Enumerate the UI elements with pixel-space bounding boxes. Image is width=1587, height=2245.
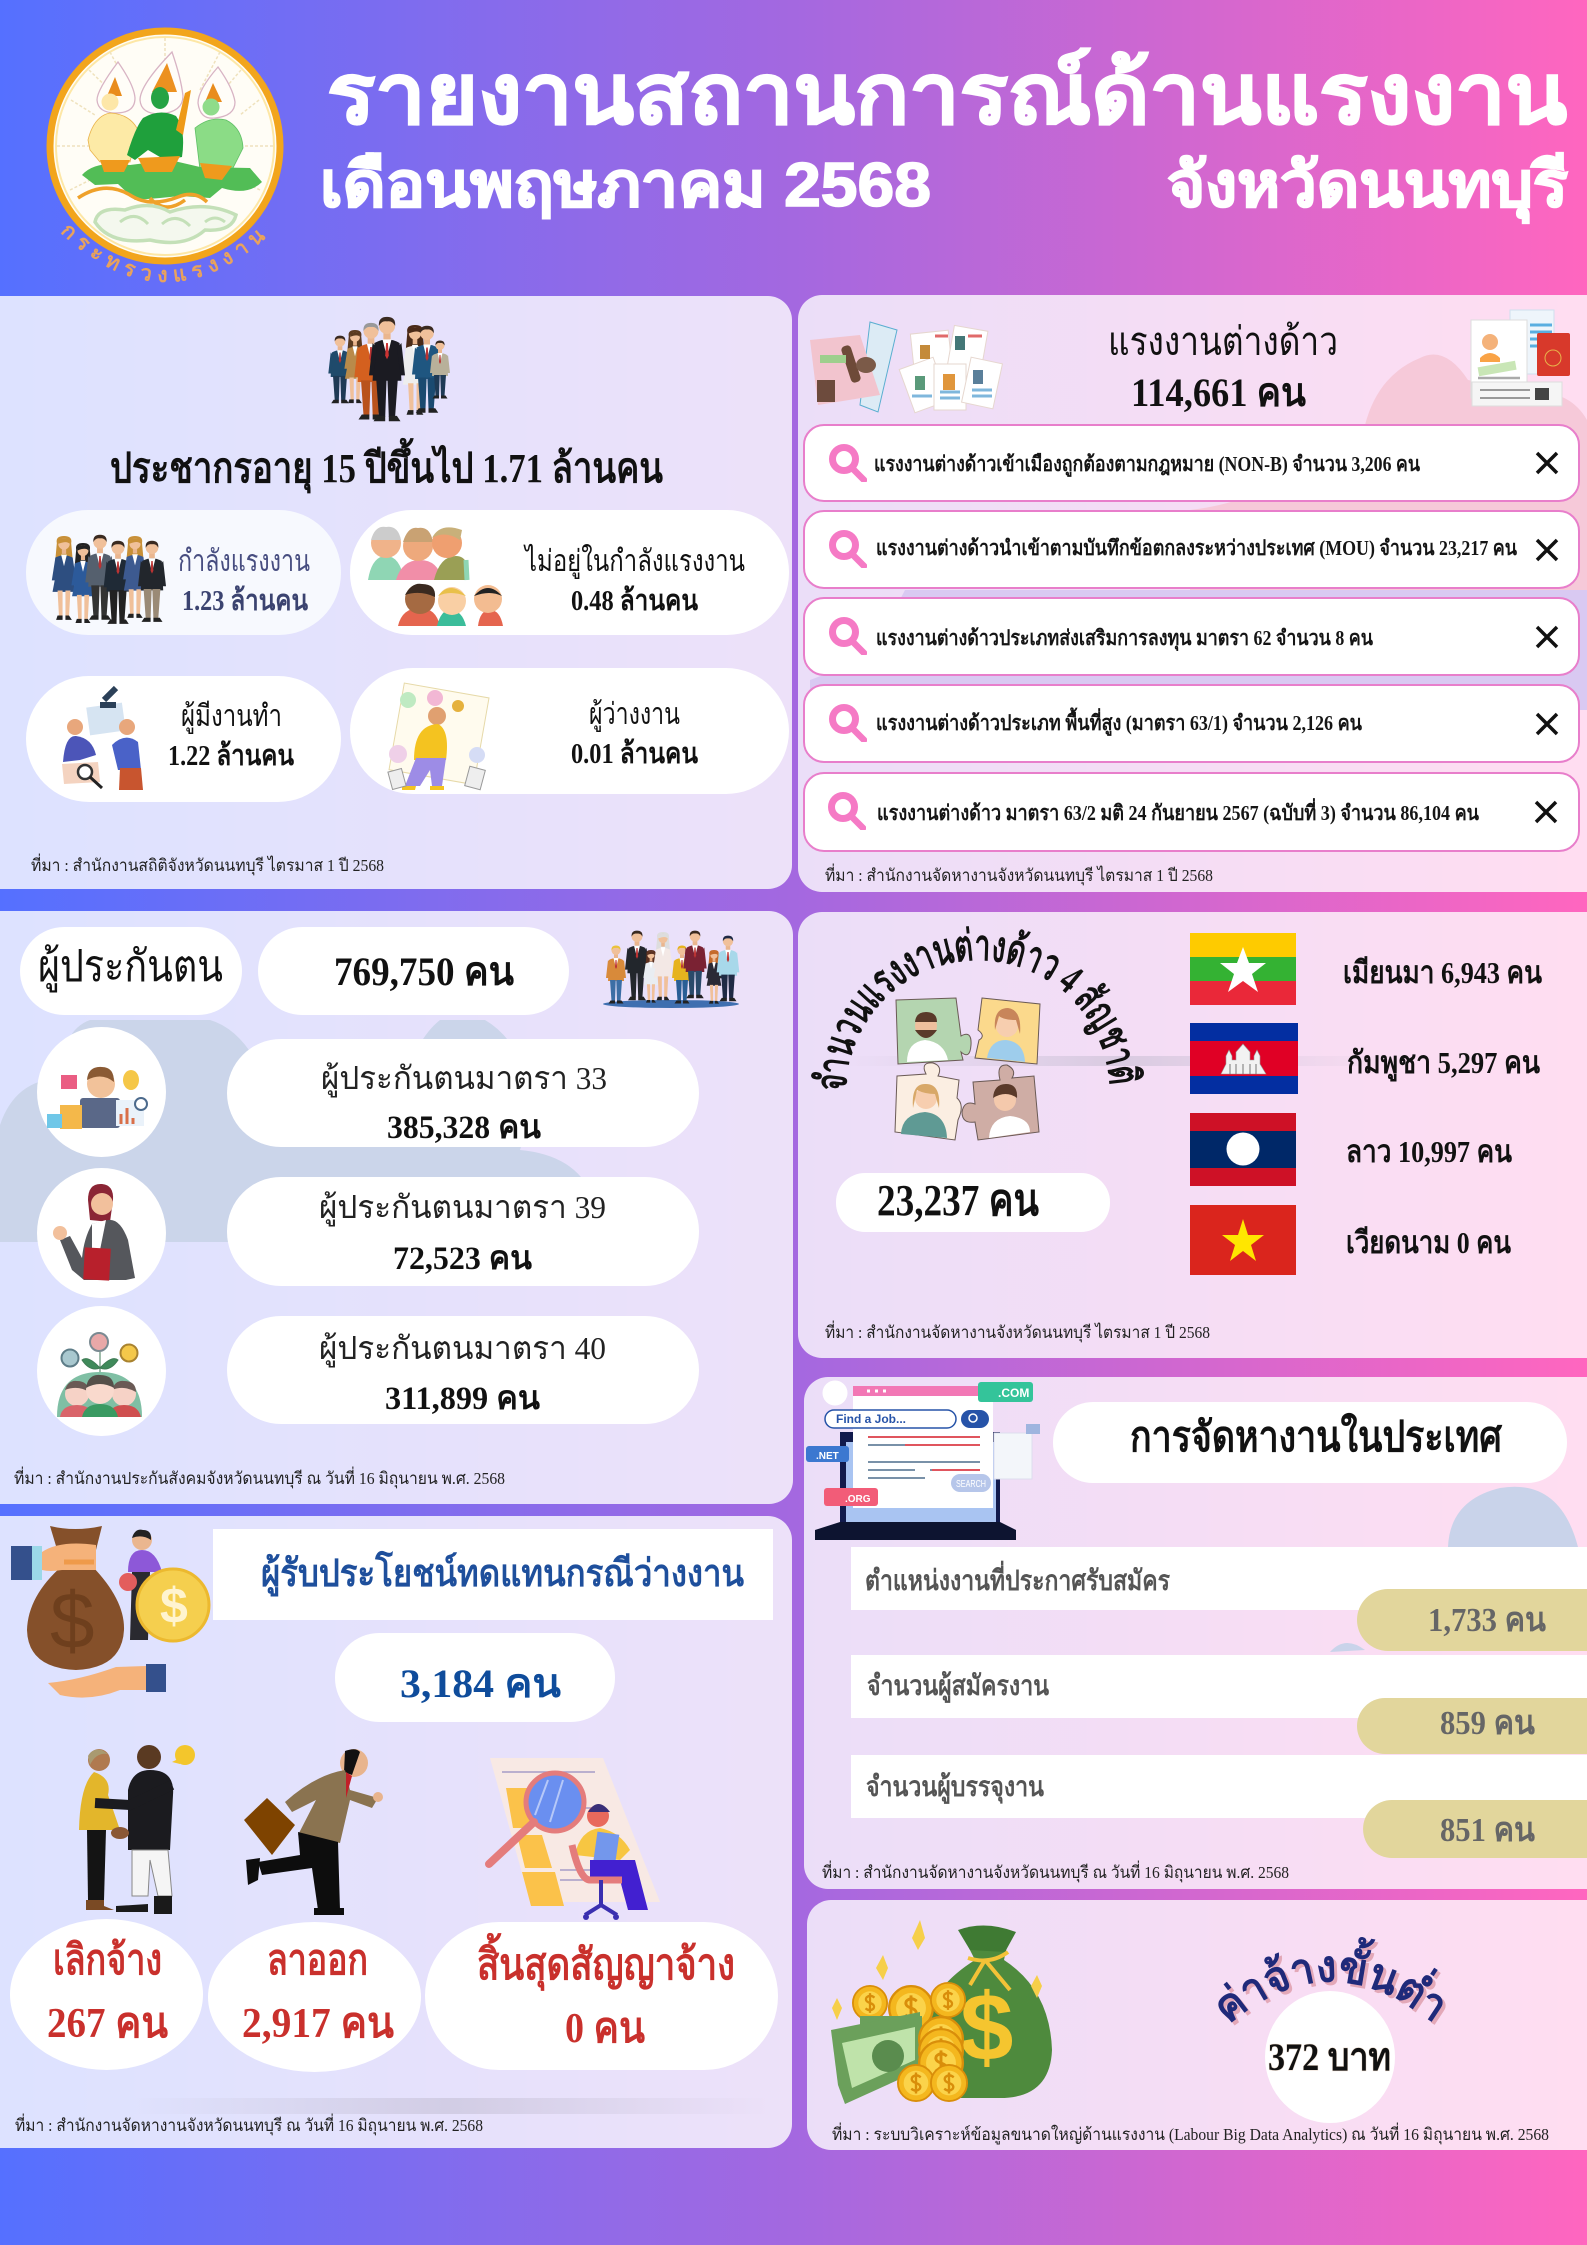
value: 0.01 ล้านคน <box>571 738 698 770</box>
icon: handshake <box>79 1745 195 1914</box>
label: กำลังแรงงาน <box>178 545 310 578</box>
value: 72,523 คน <box>393 1241 532 1277</box>
pill: terminated <box>10 1919 203 2070</box>
card: outside labour force <box>350 510 789 635</box>
source note: ที่มา : สำนักงานสถิติจังหวัดนนทบุรี ไตรมาส 1 ปี 2568 <box>31 853 384 876</box>
panel: minimum wage <box>807 1900 1587 2150</box>
pill: recipients total <box>335 1633 615 1722</box>
curved heading: จำนวนแรงงานต่างด้าว 4 สัญชาติ <box>811 926 1144 1089</box>
row: placed: จำนวนผู้บรรจุงาน <box>866 1772 1044 1804</box>
icon: job search laptop <box>806 1382 1040 1540</box>
icon: job search laptop: .NET <box>816 1451 839 1462</box>
panel: foreign workers <box>798 295 1587 892</box>
panel: domestic job placement <box>804 1377 1587 1889</box>
source note: ที่มา : สำนักงานจัดหางานจังหวัดนนทบุรี ณ วันที่ 16 มิถุนายน พ.ศ. 2568 <box>822 1860 1289 1883</box>
row: vacancies: ตำแหน่งงานที่ประกาศรับสมัคร <box>865 1560 1170 1597</box>
row: section 40 <box>37 1306 699 1436</box>
curved heading: minimum wage shadow: ค่าจ้างขั้นต่ำ <box>1223 1940 1446 2026</box>
icon: group of people <box>328 317 450 421</box>
flag: Vietnam <box>1190 1205 1296 1275</box>
pill: terminated: 267 คน <box>47 2001 168 2047</box>
label: Cambodia: กัมพูชา 5,297 คน <box>1347 1045 1540 1082</box>
icon: searching documents <box>489 1758 660 1920</box>
label: Myanmar: เมียนมา 6,943 คน <box>1343 955 1542 990</box>
icon: employed people with documents <box>62 688 143 790</box>
wage circle <box>1265 1991 1395 2123</box>
heading: foreign workers: แรงงานต่างด้าว <box>1108 319 1338 364</box>
pill: recipients total: 3,184 คน <box>400 1661 561 1706</box>
panel: four nationalities <box>798 912 1587 1358</box>
panel: population aged 15 and over <box>0 296 792 889</box>
row: placed <box>851 1755 1587 1858</box>
list item: section 63/2: แรงงานต่างด้าว มาตรา 63/2 มติ 24 กันยายน 2567 (ฉบับที่ 3) จำนวน 86,104 คน <box>877 797 1480 825</box>
icon: money bag, cash and coins: $ <box>960 1974 1013 2081</box>
list item: section 63/2 <box>804 773 1579 851</box>
icon: job search laptop: .COM <box>998 1386 1029 1400</box>
card: labour force <box>26 510 341 635</box>
flag: Myanmar <box>1190 933 1296 1005</box>
label: Vietnam: เวียดนาม 0 คน <box>1346 1225 1511 1260</box>
value: 385,328 คน <box>387 1110 541 1146</box>
pill: terminated: เลิกจ้าง <box>53 1938 162 1984</box>
pill: contract ended: สิ้นสุดสัญญาจ้าง <box>477 1932 735 1992</box>
logo caption: กระทรวงแรงงาน <box>61 226 266 282</box>
label: ผู้มีงานทำ <box>181 700 282 734</box>
row: section 33 <box>37 1027 699 1157</box>
row: applicants: 859 คน <box>1440 1705 1535 1742</box>
list item: MOU <box>804 511 1579 588</box>
pill: insured persons total: 769,750 คน <box>334 949 514 994</box>
icon: job search laptop: .ORG <box>845 1494 871 1505</box>
pill: resigned <box>208 1922 421 2072</box>
label: ผู้ประกันตนมาตรา 33 <box>321 1060 607 1098</box>
puzzle piece: woman cream <box>895 1063 961 1140</box>
label: ผู้ประกันตนมาตรา 39 <box>319 1189 606 1227</box>
icon: job search laptop: SEARCH <box>956 1479 986 1490</box>
card: unemployed <box>350 668 789 794</box>
row: vacancies <box>851 1547 1587 1651</box>
icon: running man leaving <box>244 1749 383 1915</box>
value: 1.22 ล้านคน <box>168 740 294 772</box>
pill: contract ended <box>425 1922 778 2070</box>
icon: workers <box>52 535 166 624</box>
icon: money bag and coin <box>11 1526 209 1698</box>
header: ministry of labour logo <box>46 28 284 282</box>
icon: office worker <box>37 1027 166 1157</box>
search box text: Find a Job... <box>836 1412 906 1426</box>
flag: Cambodia <box>1190 1023 1298 1094</box>
source note: ที่มา : สำนักงานจัดหางานจังหวัดนนทบุรี ณ วันที่ 16 มิถุนายน พ.ศ. 2568 <box>15 2113 483 2136</box>
label: ไม่อยู่ในกำลังแรงงาน <box>523 543 745 579</box>
source note: ที่มา : สำนักงานประกันสังคมจังหวัดนนทบุรี ณ วันที่ 16 มิถุนายน พ.ศ. 2568 <box>14 1466 505 1489</box>
icon: money bag and coin: $ <box>50 1576 94 1665</box>
icon: workers of many professions <box>603 931 739 1008</box>
puzzle piece: woman yellow <box>975 998 1040 1064</box>
row: vacancies: 1,733 คน <box>1428 1602 1546 1639</box>
icon: visa application and passport <box>1471 310 1570 406</box>
heading: population total: ประชากรอายุ 15 ปีขึ้นไป 1.71 ล้านคน <box>110 438 663 494</box>
source note: ที่มา : สำนักงานจัดหางานจังหวัดนนทบุรี ไตรมาส 1 ปี 2568 <box>825 863 1213 886</box>
label: ผู้ประกันตนมาตรา 40 <box>319 1330 606 1368</box>
pill: resigned: 2,917 คน <box>242 2001 394 2047</box>
row: placed: 851 คน <box>1440 1812 1535 1849</box>
puzzle piece: man taupe <box>962 1065 1039 1140</box>
value: foreign workers total: 114,661 คน <box>1131 370 1306 415</box>
list item: section 63/1 <box>804 685 1579 762</box>
pill: insured persons label: ผู้ประกันตน <box>38 942 223 993</box>
title: province: จังหวัดนนทบุรี <box>1167 151 1568 223</box>
puzzle piece: man <box>896 998 971 1064</box>
title: main heading: รายงานสถานการณ์ด้านแรงงาน <box>327 47 1567 141</box>
icon: four-piece puzzle of faces <box>895 998 1040 1140</box>
row: section 39 <box>37 1168 699 1298</box>
row: applicants <box>851 1655 1587 1754</box>
label: ผู้ว่างงาน <box>589 698 680 732</box>
pill: insured persons total <box>258 927 569 1015</box>
icon: money bag and coin: $ <box>160 1578 188 1634</box>
icon: job seeker <box>388 683 489 790</box>
pill: four nationalities total: 23,237 คน <box>877 1176 1039 1225</box>
source note: ที่มา : สำนักงานจัดหางานจังหวัดนนทบุรี ไตรมาส 1 ปี 2568 <box>825 1320 1210 1343</box>
card: employed <box>26 676 341 802</box>
flag: Laos <box>1190 1113 1296 1186</box>
pill: heading: การจัดหางานในประเทศ <box>1130 1412 1503 1461</box>
title: month and year: เดือนพฤษภาคม 2568 <box>320 151 931 220</box>
icon: money bag, cash and coins <box>831 1920 1052 2104</box>
curved heading: minimum wage: ค่าจ้างขั้นต่ำ <box>1218 1937 1443 2022</box>
pill: four nationalities total <box>836 1173 1110 1232</box>
label: Laos: ลาว 10,997 คน <box>1346 1134 1512 1169</box>
icon: social protection group <box>37 1306 166 1436</box>
value: minimum wage: 372 บาท <box>1268 2036 1391 2079</box>
row: applicants: จำนวนผู้สมัครงาน <box>867 1671 1049 1703</box>
icon: worker documents <box>899 325 1002 413</box>
pill: insured persons label <box>20 927 242 1015</box>
value: 311,899 คน <box>385 1381 540 1417</box>
panel: unemployment benefit <box>0 1516 792 2148</box>
pill: contract ended: 0 คน <box>565 2006 645 2052</box>
list item: NON-B <box>804 425 1579 501</box>
icon: elders and children <box>368 527 503 626</box>
list item: section 63/1: แรงงานต่างด้าวประเภท พื้นที่สูง (มาตรา 63/1) จำนวน 2,126 คน <box>876 707 1363 737</box>
icon: passport and stamp <box>810 322 897 412</box>
list item: section 62: แรงงานต่างด้าวประเภทส่งเสริมการลงทุน มาตรา 62 จำนวน 8 คน <box>876 626 1374 652</box>
panel: insured persons <box>0 911 793 1504</box>
heading box: benefit recipients: ผู้รับประโยชน์ทดแทนกรณีว่างงาน <box>261 1550 744 1597</box>
icon: business woman <box>37 1168 166 1298</box>
value: 0.48 ล้านคน <box>571 585 698 617</box>
list item: NON-B: แรงงานต่างด้าวเข้าเมืองถูกต้องตามกฎหมาย (NON-B) จำนวน 3,206 คน <box>874 452 1421 478</box>
heading box: benefit recipients <box>213 1529 773 1620</box>
value: 1.23 ล้านคน <box>182 585 308 617</box>
pill: heading <box>1053 1402 1567 1483</box>
pill: resigned: ลาออก <box>267 1938 368 1984</box>
list item: section 62 <box>804 598 1579 675</box>
